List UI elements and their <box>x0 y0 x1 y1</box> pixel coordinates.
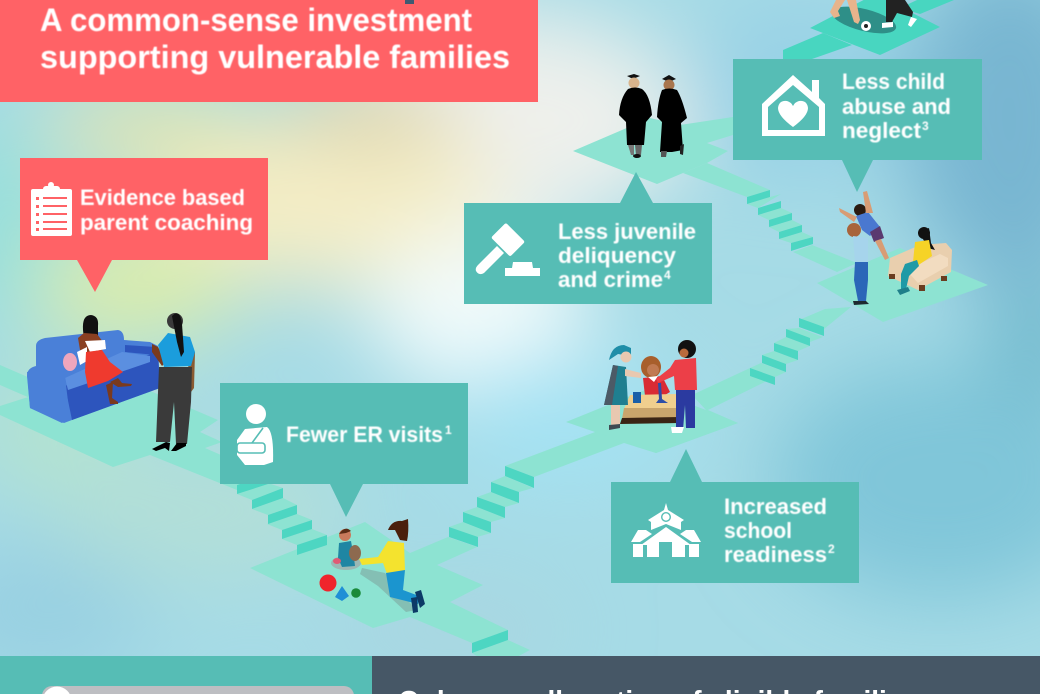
title text: supporting vulnerable families <box>40 39 510 75</box>
seated girl <box>641 356 670 398</box>
illustration: mother on sofa with parent coach <box>27 313 195 451</box>
callout text: and crime <box>558 267 663 292</box>
callout text: 2 <box>828 542 835 556</box>
icon: gavel <box>476 223 540 276</box>
callout text: school <box>724 518 792 543</box>
illustration: two graduates <box>619 74 687 158</box>
callout text: deliquency <box>558 243 677 268</box>
title text: A common-sense investment <box>40 2 472 38</box>
callout text: 1 <box>445 423 452 437</box>
callout text: Less juvenile <box>558 219 696 244</box>
mother <box>77 315 132 404</box>
callout: less juvenile delinquency and crime <box>464 172 712 304</box>
callout: fewer ER visits <box>220 383 468 517</box>
icon: person with arm sling <box>237 404 273 465</box>
callout text <box>842 69 951 143</box>
callout: evidence based parent coaching <box>20 158 268 292</box>
callout text: Less child <box>842 69 945 94</box>
seated woman <box>897 227 935 295</box>
callout text: 3 <box>922 119 929 133</box>
bottom band: dark panel <box>372 656 1040 694</box>
icon: school building <box>631 503 701 557</box>
boy in red <box>656 340 697 433</box>
icon: house with heart <box>762 75 825 136</box>
parent in yellow <box>359 519 425 613</box>
bottom band: teal panel <box>0 656 372 694</box>
callout text: abuse and <box>842 94 951 119</box>
girl in teal dress <box>604 345 641 430</box>
callout text <box>724 494 835 567</box>
callout text: parent coaching <box>80 210 253 235</box>
toddler <box>331 529 361 570</box>
title banner <box>0 0 538 102</box>
callout text: Increased <box>724 494 827 519</box>
icon: clipboard <box>31 182 72 236</box>
callout text: neglect <box>842 118 922 143</box>
lifted child <box>839 191 889 260</box>
callout: less child abuse and neglect <box>733 59 982 192</box>
illustration: parent playing with toddler <box>320 519 425 613</box>
sofa <box>27 330 160 423</box>
bottom band: grey pill <box>42 686 354 694</box>
table <box>620 383 680 424</box>
callout text <box>558 219 696 292</box>
toys <box>320 574 361 601</box>
illustration: children playing soccer <box>829 0 917 39</box>
title text <box>40 2 510 75</box>
parent coach <box>152 313 195 451</box>
graduate right <box>657 75 687 157</box>
graduate left <box>619 74 652 158</box>
illustration: children at a table <box>604 340 697 433</box>
armchair <box>888 243 952 291</box>
callout text: readiness <box>724 542 827 567</box>
illustration: family with parent lifting child <box>839 191 952 305</box>
callout: increased school readiness <box>611 449 859 583</box>
callout text <box>80 185 253 235</box>
callout text: 4 <box>664 268 671 282</box>
parent standing <box>847 223 869 305</box>
callout text: Evidence based <box>80 185 245 210</box>
callout text: Fewer ER visits <box>286 422 443 447</box>
